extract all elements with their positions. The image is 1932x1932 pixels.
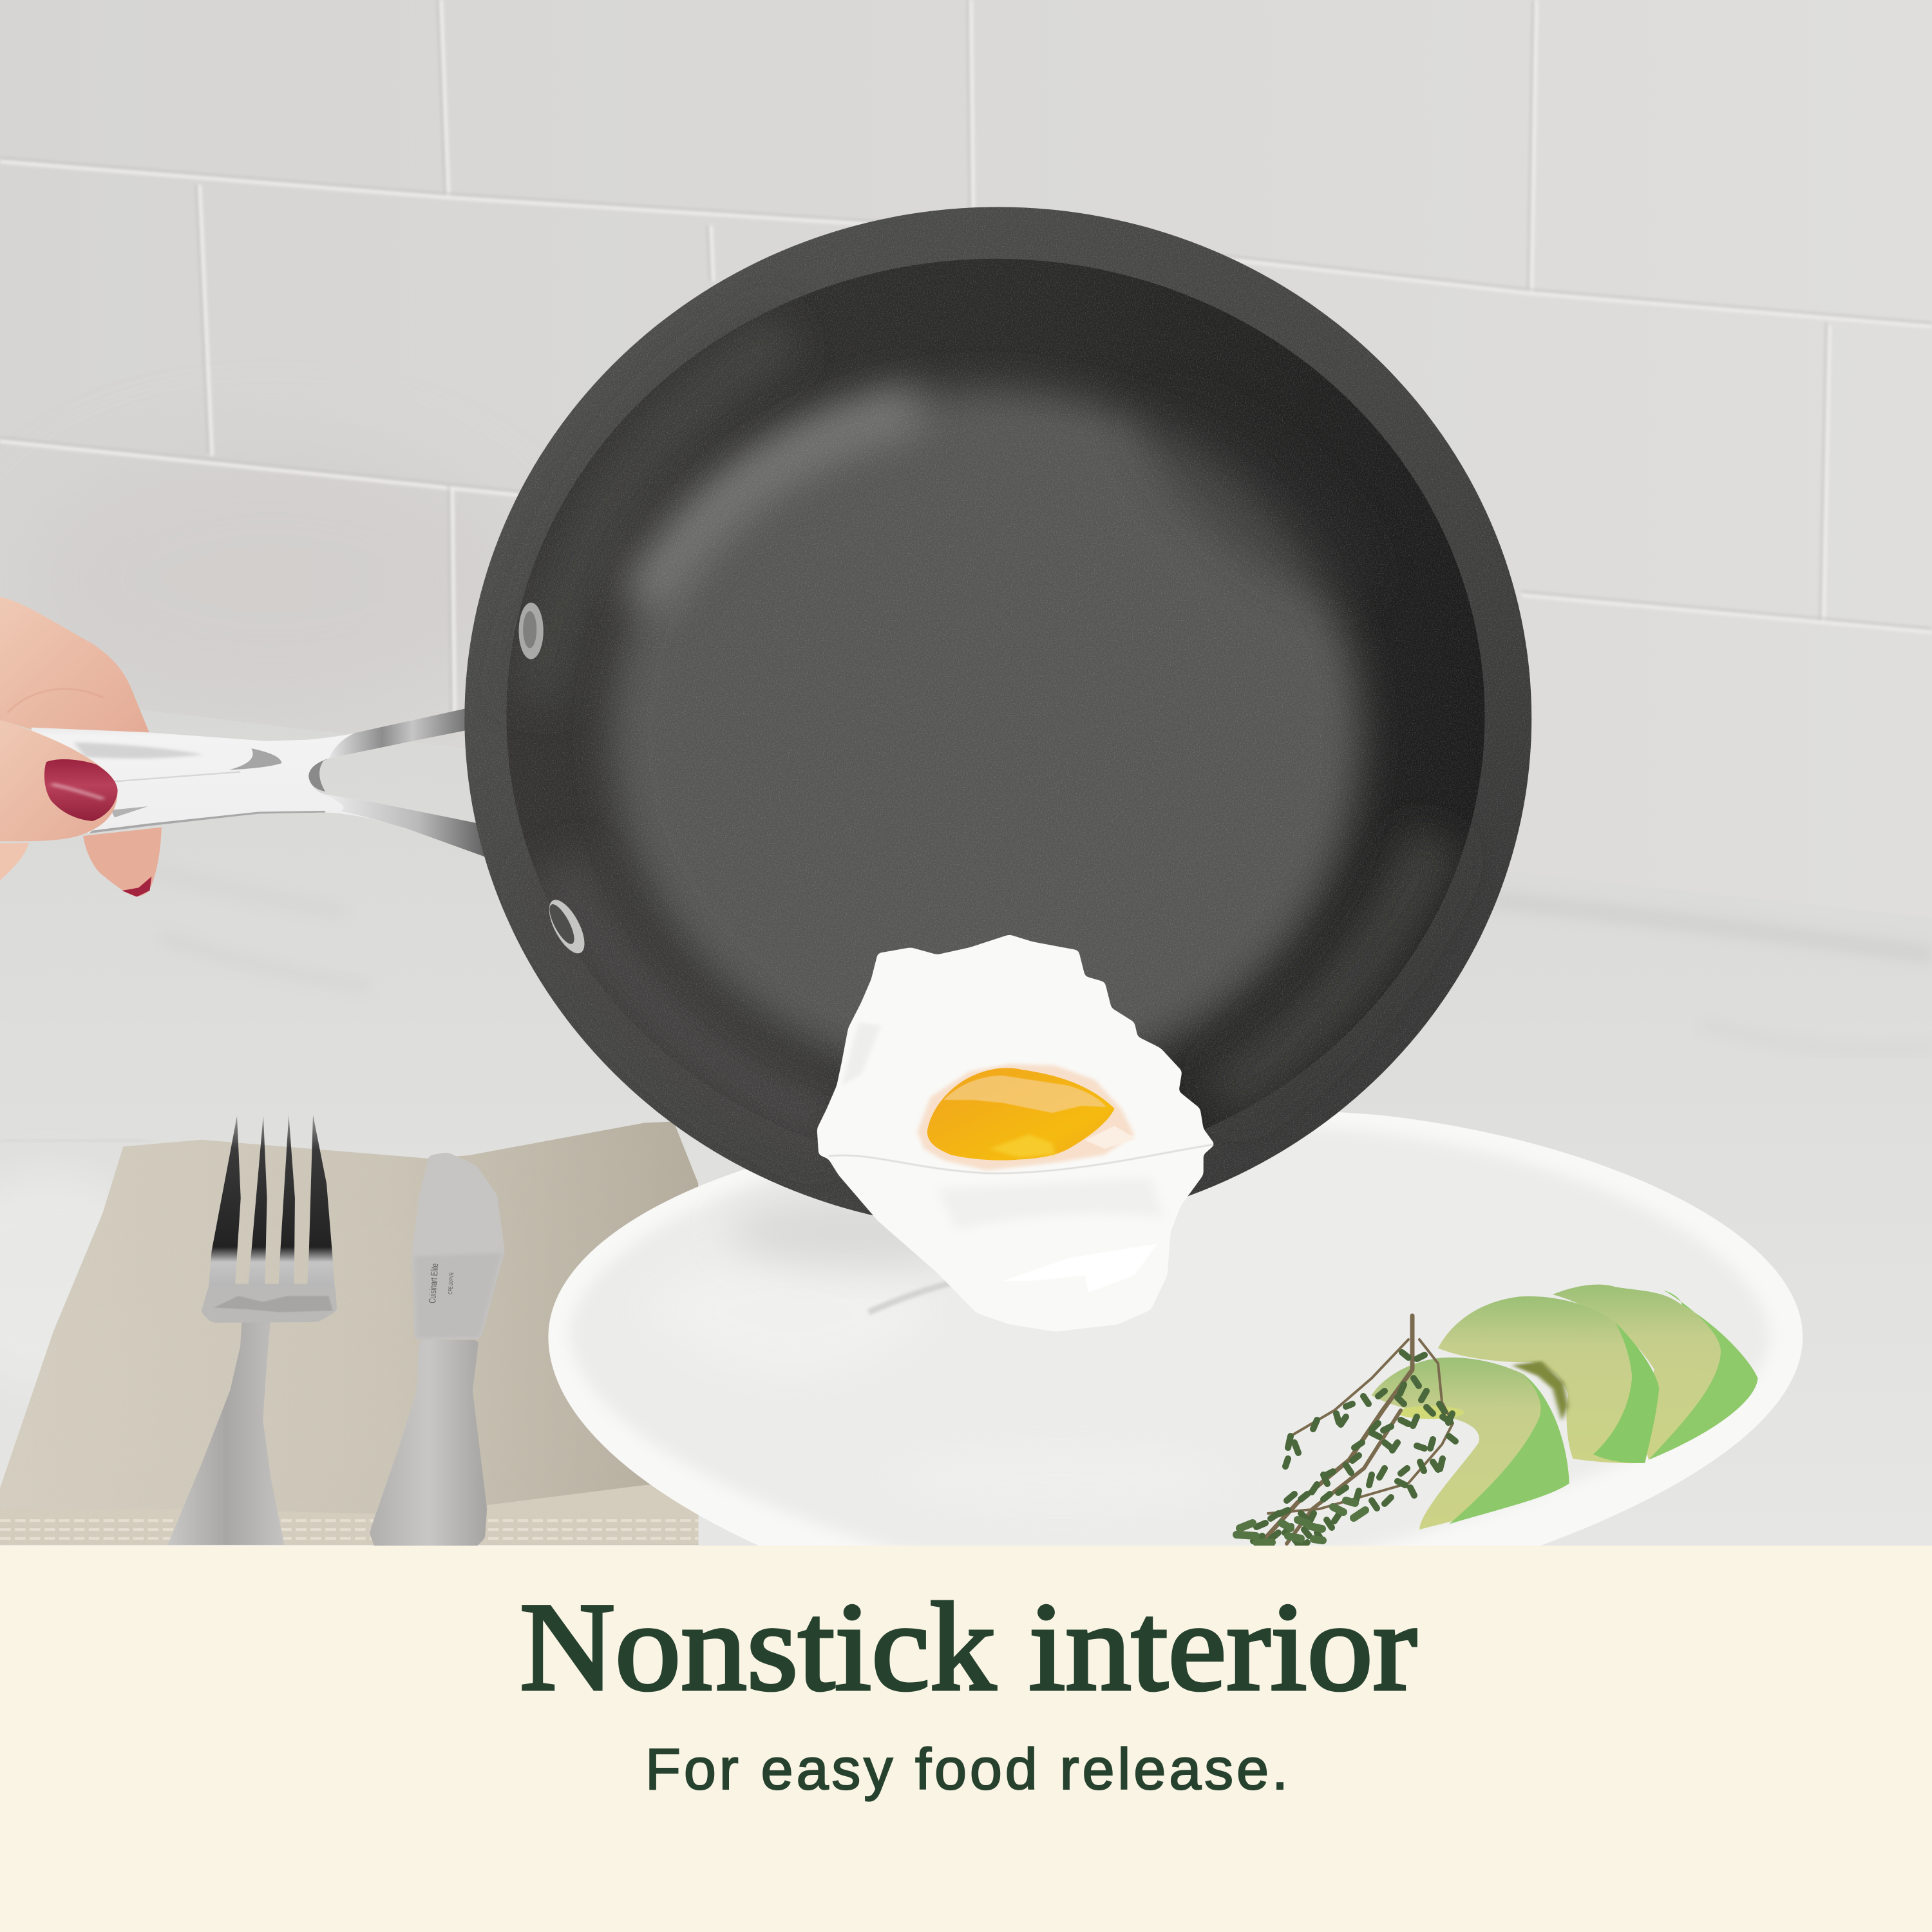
subheading: For easy food release. [645, 1738, 1288, 1802]
knife engraving: Cuisinart Elite [427, 1263, 440, 1303]
pan inner wall [506, 259, 1485, 1173]
pan coating grain [444, 185, 1553, 1257]
handle reflections [308, 758, 329, 791]
plate well [569, 1124, 1770, 1555]
thumbnail [44, 759, 118, 821]
thumb [0, 720, 118, 841]
avocado slices [1372, 1285, 1757, 1530]
lower palm [0, 843, 29, 880]
yolk highlight [943, 1075, 1106, 1113]
fork tines [209, 1115, 335, 1287]
knife engraving [427, 1263, 455, 1303]
lower fingernail [122, 876, 151, 897]
knife blade [412, 1153, 504, 1340]
bottom rivet [542, 895, 592, 958]
front slice [1372, 1358, 1569, 1530]
handle lower arm [325, 795, 495, 860]
back slice [1553, 1285, 1757, 1460]
hand: thumb and nail [0, 720, 118, 880]
thyme stems [1260, 1316, 1453, 1544]
index finger [0, 597, 149, 734]
pit hollow [1512, 1361, 1568, 1421]
heading: Nonstick interior [520, 1577, 1417, 1717]
egg yolk [927, 1068, 1115, 1160]
marble countertop [0, 692, 1932, 1553]
thyme leaves [1253, 1352, 1455, 1545]
egg yolk halo [917, 1064, 1134, 1170]
lower finger [83, 828, 162, 896]
fork head [202, 1284, 337, 1323]
middle slice [1438, 1296, 1659, 1463]
egg fold [829, 1144, 1213, 1173]
surface highlight crescent [641, 406, 918, 604]
cream panel [0, 1546, 1932, 1932]
top rivet [518, 603, 544, 659]
knife [370, 1153, 504, 1550]
frying pan [444, 185, 1553, 1257]
fork handle [167, 1314, 284, 1545]
plate [548, 1109, 1803, 1558]
pan rim [464, 207, 1531, 1229]
thyme sprig [1236, 1316, 1455, 1545]
pan cooking surface [610, 388, 1361, 1083]
knife engraving: CPE-20PVR [447, 1272, 455, 1294]
fork [167, 1115, 337, 1545]
knife handle [370, 1340, 487, 1550]
caption band [0, 1546, 1932, 1932]
hand: fingers behind handle [0, 597, 162, 897]
handle upper arm [329, 705, 480, 758]
pan interior [444, 185, 1553, 1257]
napkin [0, 1121, 698, 1545]
egg white [817, 934, 1215, 1331]
stainless handle [32, 705, 495, 860]
tiled wall [0, 0, 1932, 986]
fried egg [817, 934, 1215, 1331]
